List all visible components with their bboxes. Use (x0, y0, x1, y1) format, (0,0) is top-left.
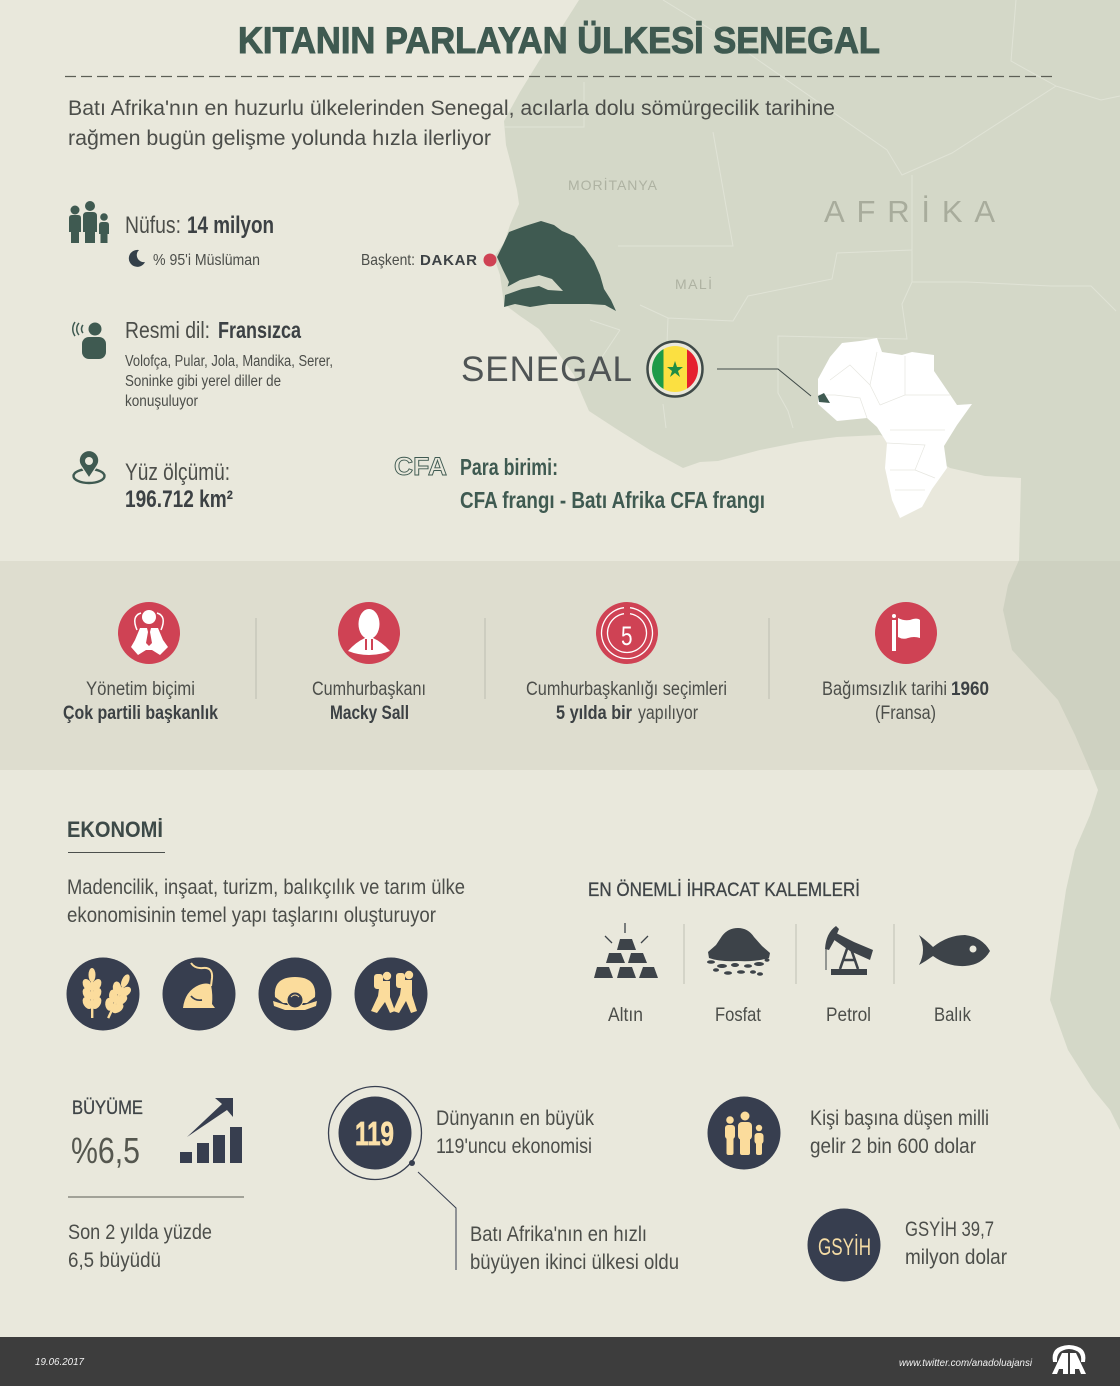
icon: rising bars (180, 1098, 242, 1163)
map labels (568, 176, 995, 292)
language block: konuşuluyor (125, 393, 198, 410)
country name: SENEGAL (461, 350, 632, 389)
icon: 119 badge: 119 (355, 1115, 394, 1152)
panel: independence: (Fransa) (875, 703, 936, 724)
panel: government: Çok partili başkanlık (63, 703, 218, 724)
growth block: BÜYÜME (72, 1098, 143, 1119)
panel: elections: yapılıyor (638, 703, 699, 724)
intro text (68, 97, 835, 150)
GDP block: milyon dolar (905, 1246, 1007, 1269)
language block: Fransızca (218, 317, 301, 343)
icon: speaker (73, 322, 106, 359)
growth block: Son 2 yılda yüzde (68, 1221, 212, 1244)
icon: flag (875, 602, 937, 664)
area block: Yüz ölçümü: (125, 459, 230, 486)
currency block: Para birimi: (460, 454, 558, 480)
area block (74, 451, 233, 513)
intro text: Batı Afrika'nın en huzurlu ülkelerinden Senegal, acılarla dolu sömürgecilik tarihine (68, 97, 835, 120)
icon: family (708, 1096, 780, 1170)
panel: president (312, 602, 426, 724)
panel: government (63, 602, 218, 724)
footer: 19.06.2017 (35, 1357, 84, 1368)
icon: GDP badge (808, 1208, 880, 1282)
map: west Africa land (494, 0, 1120, 1130)
rank block: Batı Afrika'nın en hızlı (470, 1223, 647, 1246)
capital label: Başkent: (361, 252, 415, 269)
icon: CFA: CFA (394, 453, 447, 481)
export: fish (919, 935, 990, 1026)
area block: 196.712 km² (125, 486, 233, 513)
intro text: rağmen bugün gelişme yolunda hızla ilerliyor (68, 127, 491, 150)
leader line to mini map (717, 369, 811, 396)
icon: GDP badge: GSYİH (818, 1234, 871, 1261)
panel: elections (526, 602, 727, 724)
icon: five years (596, 602, 658, 664)
currency block (394, 453, 765, 513)
rank block (328, 1086, 679, 1274)
icon: official (118, 602, 180, 664)
map labels: MALİ (675, 275, 712, 292)
icon: gold bars (594, 923, 658, 978)
icon: agriculture (66, 958, 140, 1030)
language block (73, 317, 333, 410)
population block: 14 milyon (187, 212, 274, 239)
language block: Resmi dil: (125, 317, 210, 343)
icon: five years: 5 (621, 621, 632, 651)
export dividers (684, 924, 894, 984)
panel: president: Macky Sall (330, 703, 409, 724)
income block: gelir 2 bin 600 dolar (810, 1135, 976, 1158)
heading: exports: EN ÖNEMLİ İHRACAT KALEMLERİ (588, 878, 860, 901)
mini map: Senegal highlight (818, 393, 830, 403)
export: fish: Balık (934, 1005, 971, 1026)
icon: agency logo (1052, 1345, 1086, 1374)
export: oil: Petrol (826, 1005, 871, 1026)
icon: fishing (162, 958, 236, 1030)
icon: crescent (129, 250, 145, 267)
currency block: CFA frangı - Batı Afrika CFA frangı (460, 487, 765, 513)
icon: fish (919, 935, 990, 966)
band dividers (256, 618, 769, 699)
growth block (68, 1098, 244, 1272)
icon: 119 badge (328, 1086, 422, 1180)
rank block: büyüyen ikinci ülkesi oldu (470, 1251, 679, 1274)
icon: president (338, 602, 400, 664)
income block (708, 1096, 989, 1170)
capital label (361, 252, 496, 269)
icon: Senegal flag (648, 342, 702, 396)
panel: elections: 5 yılda bir (556, 703, 633, 724)
population block (69, 201, 274, 269)
heading: economy: EKONOMİ (67, 817, 163, 842)
panel: government: Yönetim biçimi (86, 679, 195, 700)
export: gold: Altın (608, 1005, 643, 1026)
map: Senegal (497, 221, 616, 311)
export: gold (594, 923, 658, 1026)
panel: elections: Cumhurbaşkanlığı seçimleri (526, 679, 727, 700)
map labels: MORİTANYA (568, 176, 658, 193)
economy text: ekonomisinin temel yapı taşlarını oluşturuyor (67, 904, 436, 927)
icon: tourism (354, 958, 428, 1030)
capital label: DAKAR (420, 252, 477, 269)
icon: people (69, 201, 109, 243)
panel: president: Cumhurbaşkanı (312, 679, 426, 700)
population block: Nüfus: (125, 212, 181, 239)
mini map: Africa (818, 338, 972, 518)
panel: independence: 1960 (951, 679, 989, 700)
icon: phosphate pile (707, 928, 770, 976)
icon: location pin (74, 451, 104, 483)
title: KITANIN PARLAYAN ÜLKESİ SENEGAL (238, 20, 880, 61)
export: phosphate (707, 928, 770, 1026)
capital marker (484, 254, 496, 266)
income block: Kişi başına düşen milli (810, 1107, 989, 1130)
info band (0, 561, 1120, 770)
economy text (67, 876, 465, 927)
export: phosphate: Fosfat (715, 1005, 762, 1026)
economy text: Madencilik, inşaat, turizm, balıkçılık ve tarım ülke (67, 876, 465, 899)
map labels: AFRİKA (824, 194, 995, 229)
footer: www.twitter.com/anadoluajansi (899, 1358, 1033, 1369)
icon: pumpjack (825, 926, 873, 975)
growth block: %6,5 (71, 1130, 140, 1171)
heading: economy (67, 817, 165, 852)
export: oil (825, 926, 873, 1026)
icon: mining (258, 958, 332, 1030)
footer (0, 1337, 1120, 1386)
GDP block: GSYİH 39,7 (905, 1218, 994, 1241)
leader line (418, 1172, 456, 1270)
panel: independence: Bağımsızlık tarihi (822, 679, 947, 700)
language block: Volofça, Pular, Jola, Mandika, Serer, (125, 353, 333, 370)
GDP block (808, 1208, 1007, 1282)
panel: independence (822, 602, 989, 724)
language block: Soninke gibi yerel diller de (125, 373, 281, 390)
population block: % 95'i Müslüman (153, 252, 260, 269)
growth block: 6,5 büyüdü (68, 1249, 161, 1272)
rank block: 119'uncu ekonomisi (436, 1135, 592, 1158)
title divider (65, 76, 1056, 78)
rank block: Dünyanın en büyük (436, 1107, 594, 1130)
